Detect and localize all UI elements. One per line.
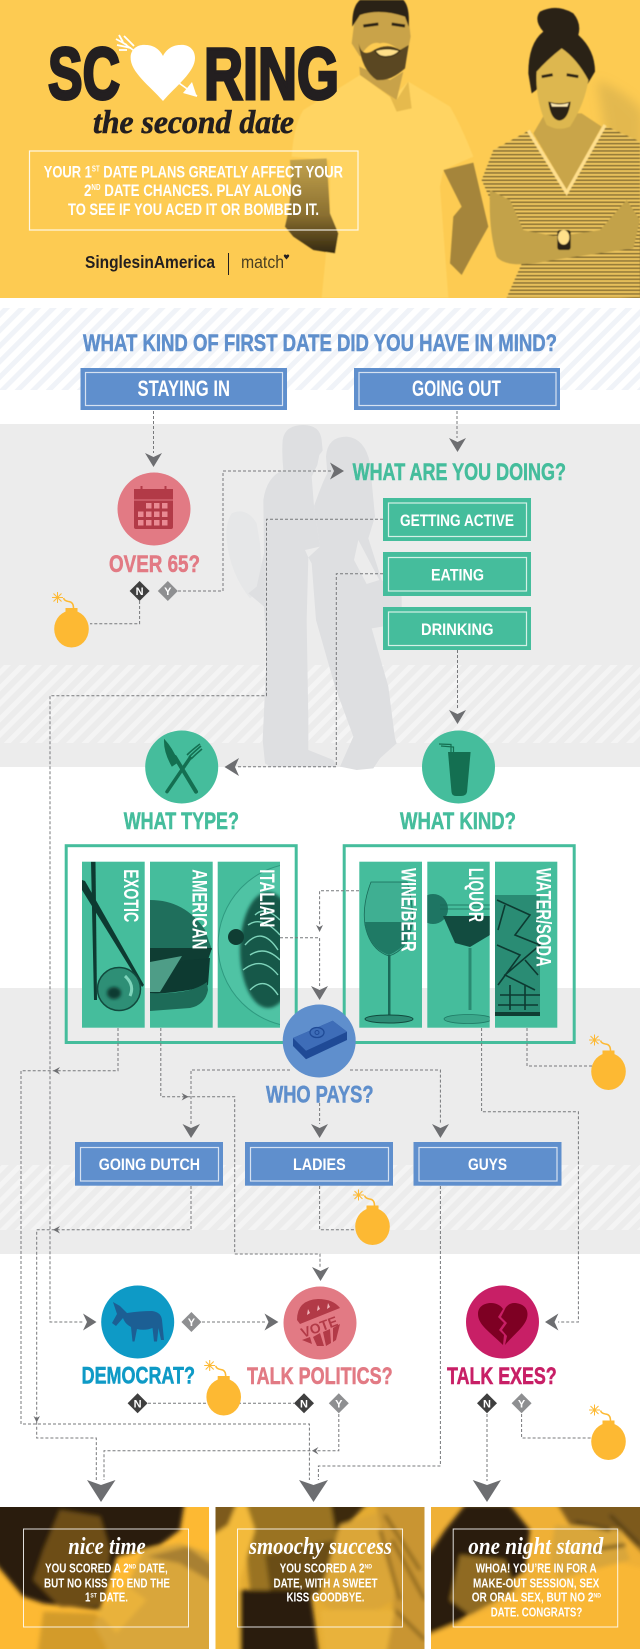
large arrow: to nice time	[87, 1480, 116, 1502]
panel: nice time: DATE.	[97, 1591, 128, 1605]
question: what type	[124, 730, 239, 835]
arrow: talk politics yes to nice time	[104, 1414, 339, 1480]
panel: one night stand	[425, 1500, 640, 1649]
panel: header	[0, 0, 640, 300]
card: american: AMERICAN	[187, 869, 210, 949]
answer: no: N	[483, 1398, 491, 1410]
question: what kind: WHAT KIND?	[400, 808, 516, 835]
arrow: going dutch to nice time	[34, 1186, 191, 1480]
arrow: ladies to bomb	[320, 1186, 355, 1230]
panel: nice time: BUT NO KISS TO END THE	[44, 1576, 170, 1590]
answer: yes: Y	[335, 1398, 343, 1410]
panel: one night stand: DATE. CONGRATS?	[491, 1606, 582, 1620]
question: democrat	[82, 1286, 195, 1389]
answer: no	[477, 1393, 497, 1413]
title: scoring	[48, 34, 339, 115]
card: italian: ITALIAN	[255, 869, 278, 927]
arrow: getting active to democrat	[50, 519, 383, 1330]
question: who pays	[266, 1004, 374, 1109]
card: wine or beer: WINE/BEER	[397, 868, 420, 952]
icon: stack of money	[283, 1004, 356, 1078]
photo: smiling man and surprised woman	[285, 0, 640, 300]
answer: no: N	[134, 1398, 142, 1410]
card: water or soda	[495, 862, 557, 1028]
couple silhouette	[226, 425, 402, 770]
title: scoring: RING	[204, 34, 339, 115]
intro text box: 2	[84, 181, 93, 200]
answer: yes	[158, 581, 178, 601]
intro text box: ND	[91, 183, 101, 192]
heading: what are you doing: WHAT ARE YOU DOING?	[353, 459, 566, 486]
button: drinking: DRINKING	[421, 620, 494, 639]
arrow: water or soda to bomb	[527, 1028, 592, 1066]
button: going out: GOING OUT	[412, 376, 501, 401]
question: democrat: DEMOCRAT?	[82, 1362, 195, 1389]
logos: singles in america and match: match	[241, 252, 284, 272]
button: going dutch: GOING DUTCH	[99, 1155, 200, 1174]
man's shirt, arms and head	[285, 0, 488, 298]
button: guys	[414, 1142, 562, 1186]
card: american	[150, 862, 213, 1028]
photo: couple kissing	[216, 1507, 424, 1649]
question: talk exes: TALK EXES?	[447, 1363, 557, 1390]
icon: broken heart	[466, 1286, 539, 1358]
panel: smoochy success: KISS GOODBYE.	[286, 1591, 364, 1605]
button: going dutch	[75, 1142, 223, 1186]
button: going out	[354, 368, 560, 410]
woman's blouse, arms and head	[482, 8, 640, 298]
button: getting active	[383, 498, 531, 541]
arrow: going out to what are you doing	[449, 411, 466, 452]
answer: no	[128, 1393, 148, 1413]
intro text box: TO SEE IF YOU ACED IT OR BOMBED IT.	[68, 200, 319, 219]
panel: smoochy success: ND	[364, 1564, 372, 1571]
icon: bomb	[353, 1190, 390, 1245]
answer: yes: Y	[188, 1317, 196, 1329]
answer: yes	[181, 1312, 201, 1332]
arrow: wine or beer to who pays	[316, 891, 359, 932]
icon: bomb	[204, 1360, 241, 1416]
icon: bomb	[589, 1404, 626, 1460]
question: talk politics: TALK POLITICS?	[247, 1363, 393, 1390]
icon: vote badge: VOTE	[299, 1313, 340, 1341]
panel: smoochy success: YOU SCORED A 2	[280, 1562, 386, 1576]
arrow: yes to what are you doing	[178, 462, 344, 591]
arrow: no answers to bomb	[148, 1402, 294, 1404]
panel: drink types	[344, 846, 574, 1042]
panel: one night stand: one night stand	[468, 1534, 604, 1560]
card: wine or beer	[359, 862, 422, 1028]
arrow: staying in to over 65	[145, 411, 162, 467]
button: ladies	[245, 1142, 393, 1186]
answer: no: N	[300, 1398, 308, 1410]
arrow: drinking to what kind	[449, 650, 466, 724]
arrow: guys to smoochy success	[318, 1186, 440, 1480]
card: liquor: LIQUOR	[464, 868, 487, 922]
panel: nice time: YOU SCORED A 2	[45, 1562, 151, 1576]
photo: couple embracing	[0, 1500, 220, 1649]
button: staying in: STAYING IN	[138, 376, 230, 401]
panel: food types	[64, 844, 298, 1044]
card: exotic	[82, 862, 145, 1028]
question: over 65: OVER 65?	[109, 551, 200, 578]
answer: yes: Y	[518, 1398, 526, 1410]
panel: smoochy success	[216, 1507, 424, 1649]
intro text box: DATE PLANS GREATLY AFFECT YOUR	[100, 162, 343, 182]
icon: donkey	[101, 1286, 174, 1358]
arrow: liquor to talk exes	[482, 1028, 578, 1330]
logos: singles in america and match: SinglesinAmerica	[85, 252, 215, 272]
panel: one night stand: MAKE-OUT SESSION, SEX	[473, 1576, 600, 1590]
panel: nice time: nice time	[68, 1534, 146, 1560]
icon: bomb	[52, 592, 89, 648]
question: what type: WHAT TYPE?	[124, 808, 239, 835]
arrow: democrat to talk politics	[202, 1314, 278, 1330]
arrow: american to talk politics	[161, 1028, 329, 1281]
panel: nice time	[0, 1500, 220, 1649]
button: eating: EATING	[431, 566, 484, 584]
answer: no	[130, 581, 150, 601]
logos: singles in america and match	[85, 252, 289, 275]
intro text box: ST	[92, 164, 100, 174]
panel: one night stand: ND	[593, 1593, 601, 1600]
button: staying in	[80, 368, 287, 410]
large arrow: to one night stand	[473, 1480, 501, 1502]
photo: couple under a blanket	[425, 1500, 640, 1649]
arrow: eating to what type	[224, 574, 383, 776]
card: liquor	[427, 862, 490, 1028]
panel: smoochy success: DATE, WITH A SWEET	[274, 1576, 378, 1590]
icon: bomb	[589, 1034, 626, 1090]
answer: no	[294, 1393, 314, 1413]
question: over 65	[109, 472, 200, 578]
arrow: who pays to going dutch and guys	[182, 1070, 449, 1138]
panel: nice time: ND	[129, 1564, 136, 1571]
icon: calendar	[118, 472, 190, 546]
arrow: italian to who pays	[280, 938, 328, 1000]
question: talk exes	[447, 1286, 557, 1390]
subtitle: the second date: the second date	[93, 105, 294, 141]
intro text box	[30, 151, 358, 230]
intro text box: YOUR 1	[44, 162, 107, 182]
button: guys: GUYS	[468, 1155, 507, 1174]
answer: yes	[512, 1393, 532, 1413]
icon: heart with arrow	[116, 35, 197, 101]
icon: drink cup with straw	[422, 730, 495, 804]
button: getting active: GETTING ACTIVE	[400, 511, 514, 530]
card: water or soda: WATER/SODA	[532, 868, 555, 967]
panel: nice time: 1	[85, 1591, 92, 1605]
card: italian	[218, 862, 280, 1028]
answer: yes: Y	[164, 586, 172, 598]
button: drinking	[383, 607, 531, 650]
button: ladies: LADIES	[293, 1155, 346, 1174]
button: eating	[383, 552, 531, 596]
icon: vote badge	[284, 1286, 356, 1360]
question: talk politics	[247, 1286, 393, 1390]
arrow: who pays to ladies	[311, 1103, 328, 1138]
answer: yes	[329, 1393, 349, 1413]
intro text box: DATE CHANCES. PLAY ALONG	[100, 181, 302, 200]
arrow: talk exes yes to bomb	[522, 1414, 592, 1438]
card: exotic: EXOTIC	[119, 869, 142, 922]
panel: nice time: DATE,	[136, 1562, 168, 1576]
panel: smoochy success: smoochy success	[248, 1534, 392, 1560]
question: who pays: WHO PAYS?	[266, 1082, 374, 1109]
arrow: exotic to smoochy success	[21, 1028, 309, 1480]
panel: nice time: ST	[90, 1593, 97, 1600]
large arrow: to smoochy success	[299, 1480, 328, 1502]
question: what kind	[400, 730, 516, 835]
panel: one night stand: WHOA! YOU’RE IN FOR A	[476, 1562, 597, 1576]
panel: one night stand: OR ORAL SEX, BUT NO 2	[472, 1591, 623, 1605]
answer: no: N	[136, 586, 144, 598]
icon: knife and fork	[145, 730, 218, 804]
arrow: no to bomb	[90, 601, 140, 624]
title: scoring: SC	[48, 34, 120, 115]
arrow: talk exes no to one night stand	[486, 1414, 488, 1481]
